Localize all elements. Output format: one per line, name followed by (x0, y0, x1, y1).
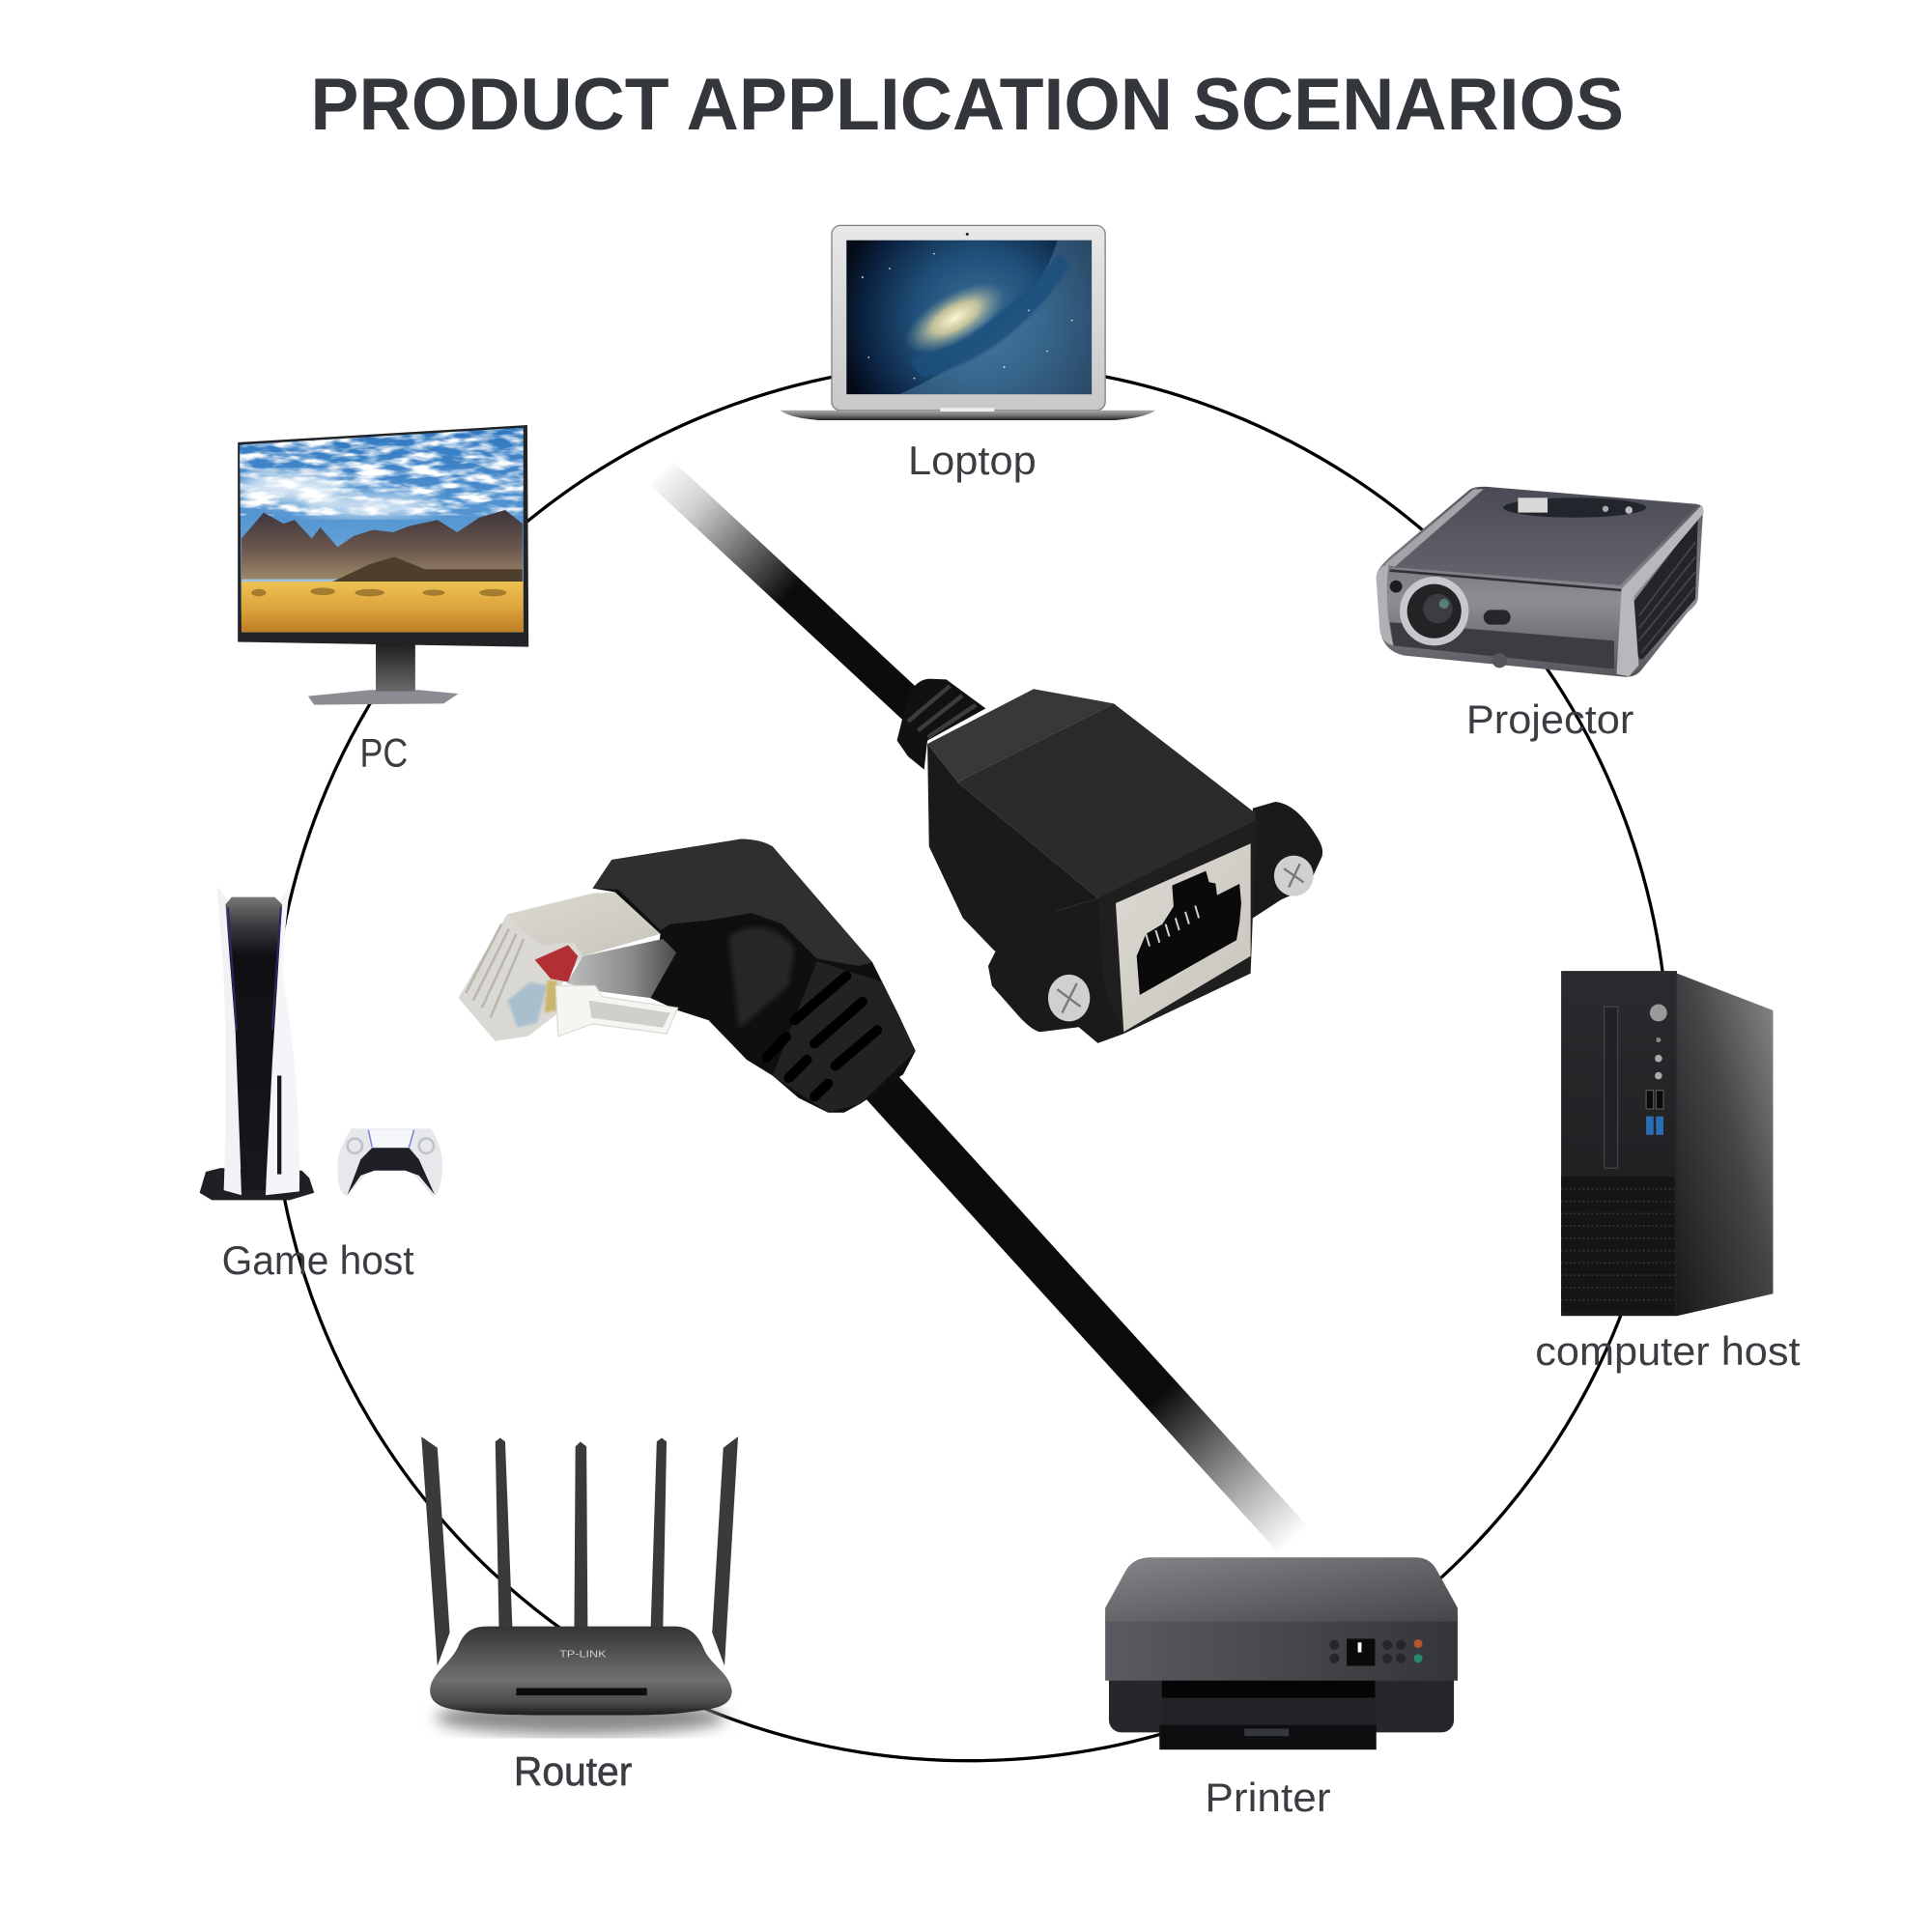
icon: router: TP-LINK (559, 1650, 607, 1661)
router body (430, 1627, 732, 1716)
icon: projector (1377, 487, 1704, 677)
connection ring (271, 363, 1668, 1761)
printer control panel (1329, 1638, 1423, 1665)
boot (593, 839, 916, 1113)
label: PC: PC (359, 729, 408, 775)
console body (216, 886, 299, 1195)
cable lower segment (863, 1065, 1293, 1540)
socket opening (1137, 871, 1241, 995)
panel: angled RJ45 plug (458, 839, 916, 1113)
label: Game host: Game host (222, 1237, 414, 1283)
label: Loptop: Loptop (908, 438, 1037, 483)
strain relief (897, 679, 985, 770)
lens (1400, 577, 1468, 645)
paper tray (1159, 1681, 1377, 1749)
socket housing (927, 689, 1256, 952)
projector vents (1634, 518, 1698, 659)
label: Printer: Printer (1205, 1775, 1331, 1820)
icon: monitor (238, 425, 528, 705)
controller (337, 1128, 442, 1197)
left flange ear and front frame (988, 802, 1322, 1043)
ports (1646, 1037, 1663, 1135)
label: Router: Router (514, 1748, 632, 1794)
boot rib slots (766, 976, 877, 1096)
latch clip (555, 985, 678, 1037)
label: computer host: computer host (1535, 1328, 1801, 1374)
label: Projector: Projector (1466, 696, 1634, 742)
antennas (421, 1436, 738, 1665)
power button (1650, 1005, 1667, 1021)
monitor stand (308, 643, 458, 705)
silver socket frame (1116, 843, 1251, 1032)
screws (1048, 856, 1314, 1021)
console stand (200, 1168, 314, 1200)
clear plug body (458, 914, 582, 1041)
control panel (1503, 497, 1646, 518)
title: PRODUCT APPLICATION SCENARIOS (310, 64, 1624, 146)
icon: tower computer (1561, 971, 1773, 1316)
icon: router (421, 1436, 738, 1735)
front bezel (1097, 820, 1256, 1034)
panel: cable with strain relief and panel mount socket (662, 473, 1322, 1540)
metal shield (507, 892, 676, 998)
icon: game console and controller (200, 886, 442, 1200)
icon: laptop (780, 225, 1155, 420)
optical drive (1605, 1007, 1618, 1168)
icon: printer (1105, 1557, 1458, 1749)
cable upper segment (662, 473, 924, 717)
